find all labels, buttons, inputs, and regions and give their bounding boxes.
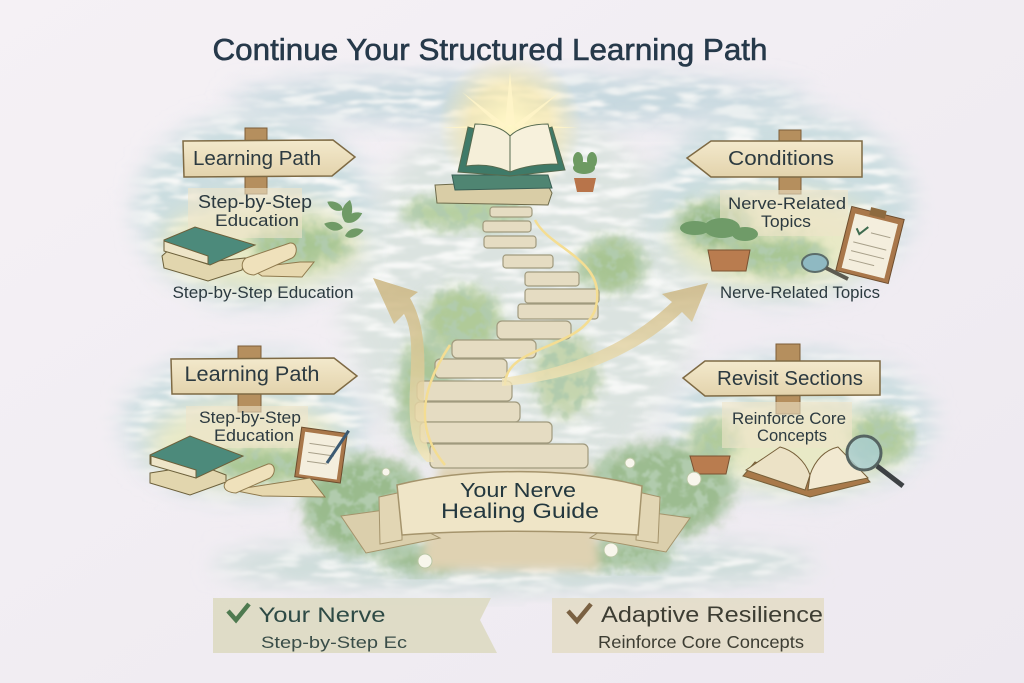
checklist left: Your Nerve [258, 604, 386, 627]
signpost: revisit sections: Revisit Sections [717, 368, 863, 390]
icon: open book [743, 447, 870, 497]
post [238, 346, 261, 412]
icon: magnifier [847, 436, 903, 486]
icon: book stack [435, 175, 552, 205]
icon: open book [458, 124, 565, 176]
icon: check [228, 604, 249, 620]
icon: clipboard [836, 203, 905, 284]
post [245, 128, 267, 194]
arrow: to learning path [373, 278, 434, 462]
signpost: learning path: Learning Path [193, 148, 321, 170]
banner: your nerve healing guide [341, 472, 690, 553]
banner tails [341, 510, 690, 553]
panel: learning path top [162, 128, 364, 302]
post [779, 130, 801, 194]
checklist right [552, 598, 824, 653]
banner body [397, 472, 642, 535]
open book on stack [435, 124, 597, 205]
note board: Education [214, 427, 294, 445]
note board: Nerve-Related [728, 194, 846, 213]
icon: magnifier [802, 254, 848, 279]
plants [323, 198, 364, 239]
checklist left: Step-by-Step Ec [261, 633, 408, 652]
signpost: conditions [687, 141, 862, 177]
note board [188, 188, 312, 238]
note board: Reinforce Core [732, 410, 846, 428]
icon: books [162, 227, 255, 281]
signpost: learning path [183, 140, 355, 177]
icon: books [150, 436, 243, 495]
signpost: conditions: Conditions [728, 148, 834, 170]
caption: Nerve-Related Topics [720, 284, 880, 302]
signpost: learning path: Learning Path [184, 363, 320, 386]
greenery along path [303, 196, 732, 572]
sun glow [438, 53, 582, 197]
panel: revisit sections [683, 344, 903, 497]
icon: clipboard [295, 424, 349, 483]
signpost: revisit sections [683, 361, 880, 396]
note board: Concepts [757, 427, 827, 445]
icon: check [568, 604, 591, 621]
stone staircase [415, 207, 599, 468]
icon: scroll [242, 243, 314, 277]
title: Continue Your Structured Learning Path [212, 32, 768, 67]
icon: pot [690, 456, 730, 474]
flowers [382, 458, 701, 568]
note board: Step-by-Step [198, 192, 312, 212]
greenery around panels [215, 203, 910, 481]
icon: scroll [224, 464, 325, 497]
checklist right: Adaptive Resilience [601, 602, 823, 627]
panel: learning path lower [150, 346, 357, 497]
watercolor sky wash [123, 74, 932, 591]
icon: potted plant [573, 152, 597, 192]
note board [720, 190, 848, 236]
note board: Step-by-Step [199, 409, 301, 427]
arrow: to conditions [502, 283, 708, 386]
checklist right: Reinforce Core Concepts [598, 632, 804, 652]
icon: potted plant [680, 218, 758, 271]
checklist left [213, 598, 497, 653]
panel: conditions [680, 130, 905, 302]
note board: Education [215, 211, 299, 230]
signpost: learning path [171, 358, 357, 394]
note board [722, 402, 852, 448]
caption: Step-by-Step Education [172, 284, 354, 302]
golden path lines [425, 220, 597, 465]
note board: Topics [761, 212, 811, 231]
post [776, 344, 800, 414]
banner: your nerve healing guide: Your Nerve [460, 480, 576, 502]
banner: your nerve healing guide: Healing Guide [441, 499, 599, 523]
note board [186, 406, 308, 448]
banner folds [379, 492, 660, 544]
